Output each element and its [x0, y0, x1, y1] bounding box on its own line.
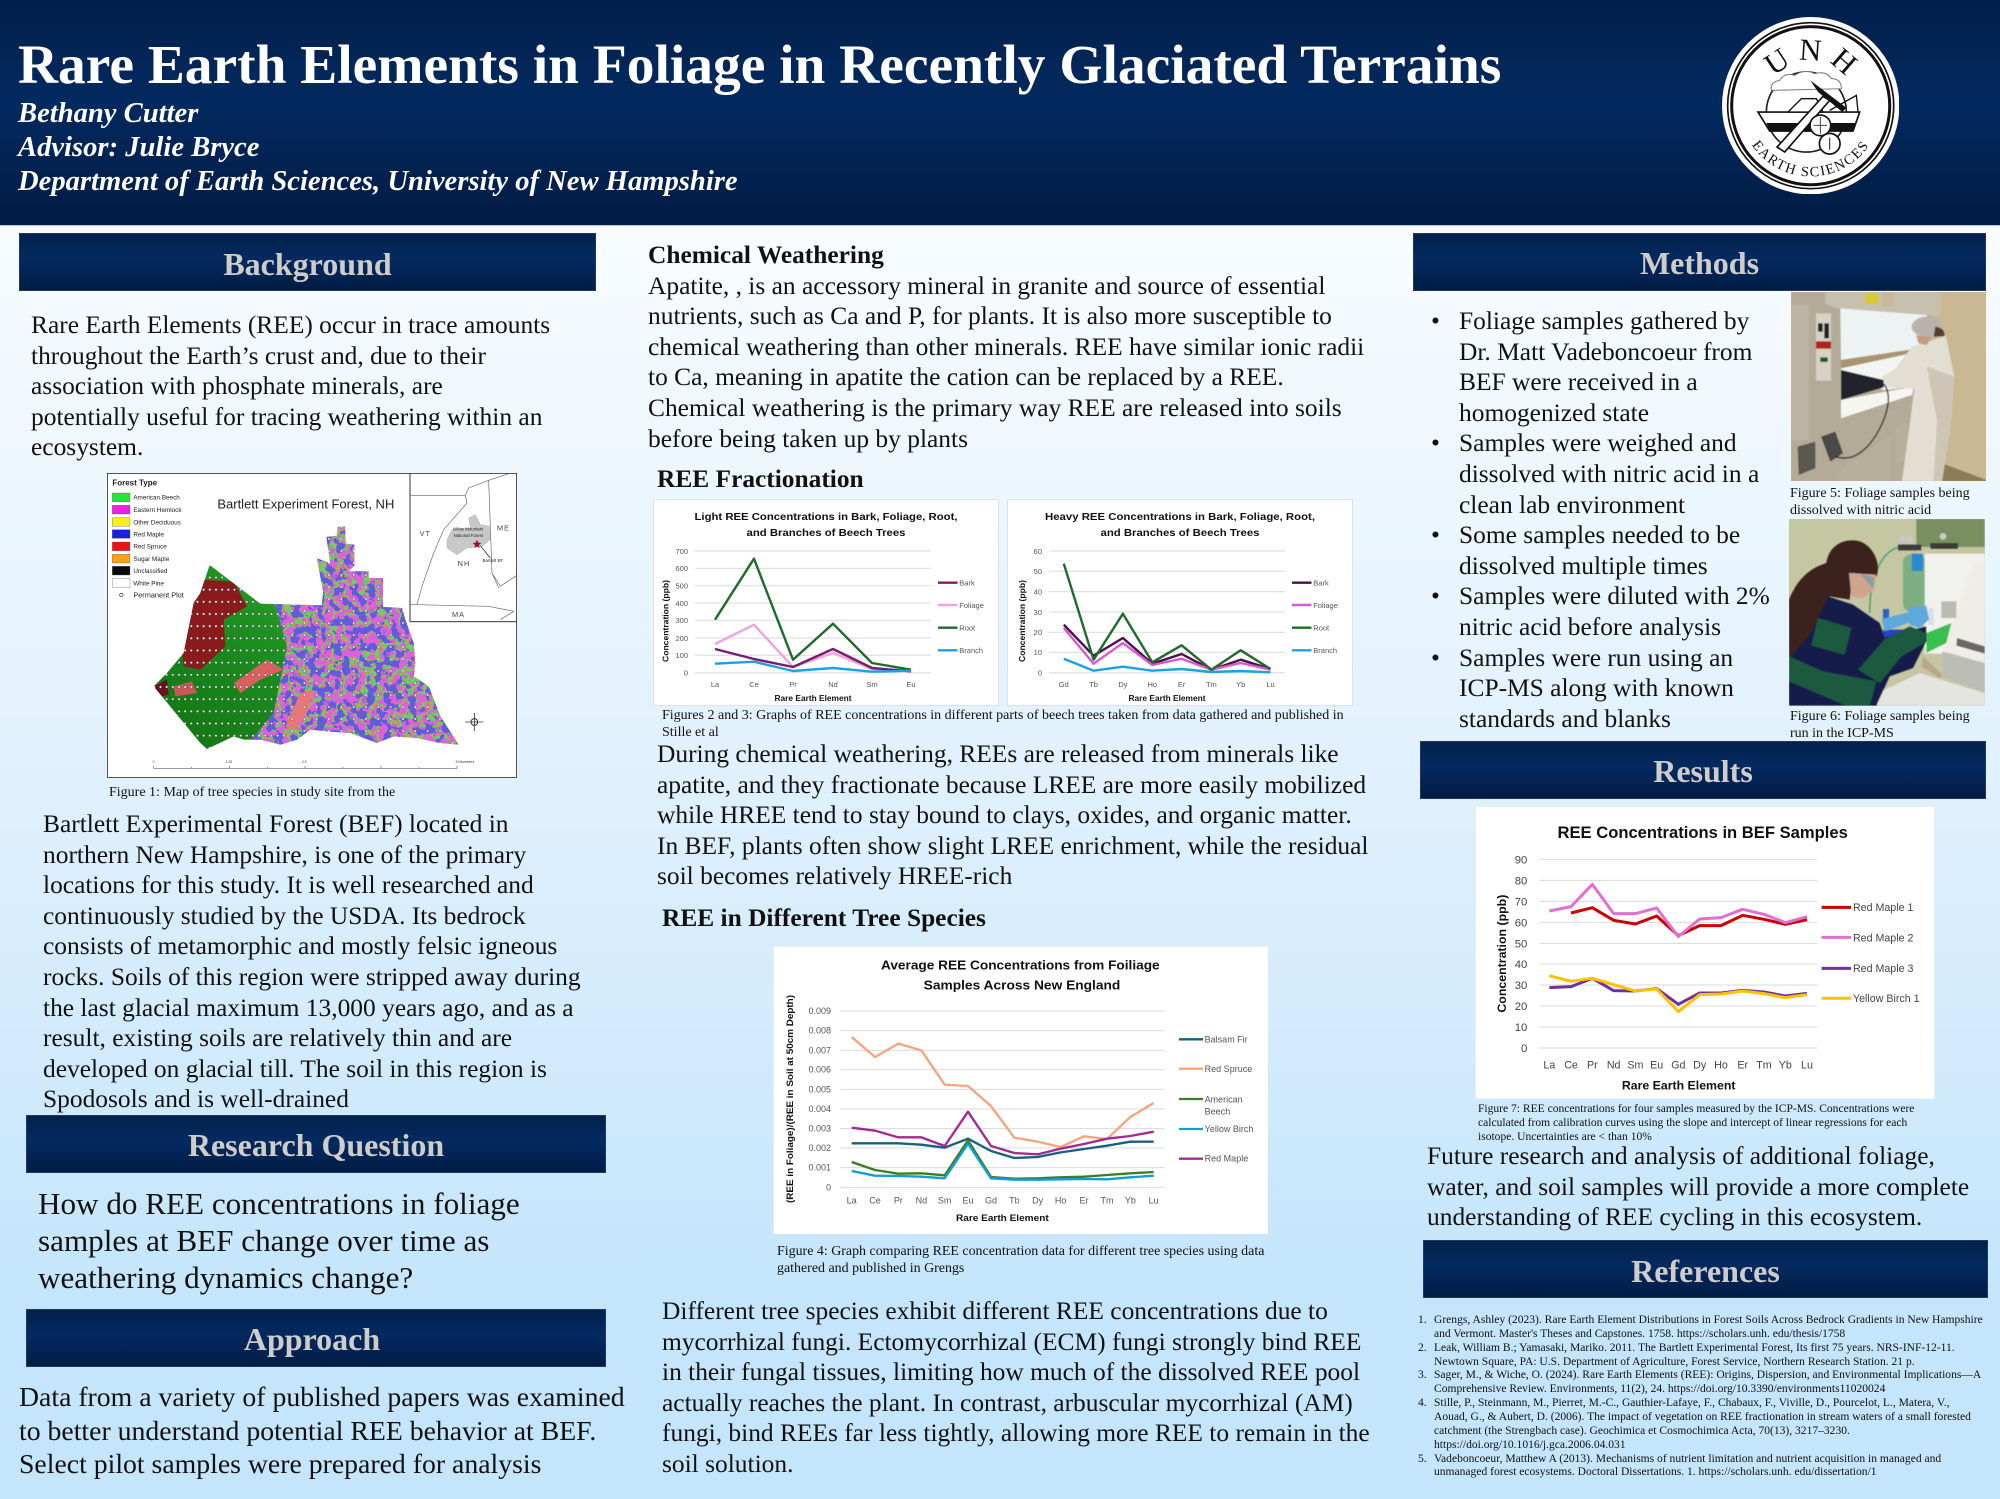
- caption: figure 1: Figure 1: Map of tree species in study site from the: [109, 785, 395, 800]
- text block: apatite: chemical weathering than other minerals. REE have similar ionic radii: [648, 332, 1364, 361]
- figure 7: BEF samples line chart: 80: [1514, 875, 1527, 887]
- figure 2: light REE chart: Pr: [789, 680, 797, 689]
- map legend: Permanent Plot: [133, 591, 184, 600]
- figure 2: light REE chart: La: [711, 680, 720, 689]
- figure 4: species line chart: Samples Across New England: [923, 977, 1120, 992]
- map legend: Red Maple: [133, 531, 164, 538]
- caption: figure 6: Figure 6: Foliage samples being: [1790, 709, 1970, 724]
- figure 3: heavy REE chart: 60: [1034, 547, 1042, 556]
- text block: Bartlett Experimental Forest: locations for this study. It is well researched and: [43, 870, 534, 899]
- figure 4: species line chart: Gd: [985, 1195, 997, 1205]
- figure 4: species line chart: La: [846, 1195, 856, 1205]
- figure 2: light REE chart: Root: [959, 624, 976, 633]
- panel: approach: [19, 1309, 625, 1480]
- bulleted list: methods: •: [1431, 520, 1440, 549]
- map legend: Eastern Hemlock: [133, 507, 182, 514]
- figure 2: light REE chart: Light REE Concentrations in Bark, Foliage, Root,: [694, 511, 958, 523]
- heading: Results: Results: [1653, 753, 1753, 789]
- figure 4: species line chart: American: [1204, 1094, 1242, 1104]
- figure 2: light REE chart: [653, 499, 999, 706]
- figure 4: species line chart: Dy: [1032, 1195, 1043, 1205]
- scale bar and north arrow: 0: [152, 760, 154, 764]
- text block: mycorrhizal fungi: soil solution.: [662, 1449, 793, 1478]
- caption: figure 6: [1790, 709, 1970, 741]
- figure 3: heavy REE chart: and Branches of Beech Trees: [1100, 527, 1260, 539]
- scale bar and north arrow: 2.5: [302, 760, 306, 764]
- figure 4: species line chart: 0.009: [808, 1006, 831, 1016]
- bulleted list: methods: Samples were diluted with 2%: [1459, 581, 1770, 610]
- figure 7: BEF samples line chart: Red Maple 3: [1853, 963, 1913, 975]
- text block: Bartlett Experimental Forest: Spodosols and is well-drained: [43, 1084, 349, 1113]
- figure 7: BEF samples line chart: Dy: [1693, 1060, 1707, 1072]
- figure 7: BEF samples line chart: 70: [1514, 896, 1527, 908]
- figure 4: species line chart: Tb: [1009, 1195, 1019, 1205]
- panel: REE fractionation: [653, 465, 1369, 890]
- reference list: Grengs, Ashley (2023). Rare Earth Element Distributions in Forest Soils Across Bedrock Gradients in New Hampshire: [1434, 1314, 1983, 1326]
- figure 4: species line chart: 0.008: [808, 1025, 831, 1035]
- figure 3: heavy REE chart: Root: [1313, 624, 1330, 633]
- reference list: 4.: [1418, 1397, 1427, 1409]
- text block: question: weathering dynamics change?: [38, 1260, 413, 1295]
- inset locator map: White Mountain: [453, 527, 483, 532]
- figure 3: heavy REE chart: 10: [1034, 648, 1042, 657]
- heading: Methods: Methods: [1640, 245, 1759, 281]
- figure 3: heavy REE chart: [1007, 499, 1353, 706]
- figure 7: BEF samples line chart: Nd: [1607, 1060, 1620, 1072]
- figure 1: forest type map: Bartlett Experiment Forest, NH: [217, 496, 394, 511]
- map legend: American Beech: [133, 495, 180, 502]
- caption: figure 4: [777, 1244, 1264, 1276]
- figure 7: BEF samples line chart: 30: [1514, 980, 1527, 992]
- figure 4: species line chart: Rare Earth Element: [956, 1213, 1048, 1223]
- inset locator map: [410, 473, 516, 622]
- figure 7: BEF samples line chart: Er: [1737, 1060, 1748, 1072]
- caption: figures 2 and 3: Stille et al: [662, 725, 719, 740]
- text block: what REE are: association with phosphate minerals, are: [31, 371, 443, 400]
- heading: Approach: Approach: [244, 1321, 380, 1357]
- heading: References: [1423, 1240, 1988, 1298]
- text block: fractionation: [657, 739, 1369, 890]
- figure 4: species line chart: 0.001: [808, 1162, 831, 1172]
- figure 3: heavy REE chart: Branch: [1313, 646, 1337, 655]
- reference list: and Vermont. Master's Theses and Capstones. 1758. https://scholars.unh. edu/thesis/1758: [1434, 1328, 1845, 1340]
- bulleted list: methods: •: [1431, 428, 1440, 457]
- figure 7: BEF samples line chart: Rare Earth Element: [1622, 1079, 1735, 1093]
- header banner: [0, 0, 2000, 226]
- figure 2: light REE chart: and Branches of Beech Trees: [746, 527, 906, 539]
- text block: future research: water, and soil samples will provide a more complete: [1427, 1172, 1969, 1201]
- bulleted list: methods: standards and blanks: [1459, 704, 1671, 733]
- figure 4: species line chart: (REE in Foliage)/(REE in Soil at 50cm Depth): [785, 995, 795, 1203]
- panel: chemical weathering: [648, 241, 1364, 453]
- caption: figure 5: [1790, 486, 1970, 518]
- text block: mycorrhizal fungi: actually reaches the plant. In contrast, arbuscular mycorrhizal (AM): [662, 1388, 1353, 1417]
- figure 2: light REE chart: Eu: [906, 680, 916, 689]
- figure 3: heavy REE chart: Concentration (ppb): [1018, 580, 1027, 662]
- figure 2: light REE chart: Ce: [749, 680, 759, 689]
- bulleted list: methods: Dr. Matt Vadeboncoeur from: [1459, 337, 1752, 366]
- text block: Bartlett Experimental Forest: continuously studied by the USDA. Its bedrock: [43, 901, 526, 930]
- figure 7: BEF samples line chart: 0: [1521, 1043, 1527, 1055]
- figure 4: species line chart: Red Spruce: [1204, 1064, 1252, 1074]
- figure 2: light REE chart: Rare Earth Element: [774, 694, 852, 703]
- figure 7: BEF samples line chart: [1475, 806, 1935, 1099]
- bulleted list: methods: •: [1431, 643, 1440, 672]
- text block: mycorrhizal fungi: fungi, bind REEs far less tightly, allowing more REE to remain in the: [662, 1418, 1370, 1447]
- reference list: Newtown Square, PA: U.S. Department of Agriculture, Forest Service, Northern Research Station. 21 p.: [1434, 1356, 1915, 1368]
- text block: apatite: [648, 271, 1364, 453]
- heading: Chemical Weathering: Chemical Weathering: [648, 241, 884, 269]
- figure 2: light REE chart: Concentration (ppb): [662, 580, 670, 662]
- authors and affiliation: [16, 98, 738, 197]
- figure 4: species line chart: Ho: [1055, 1195, 1066, 1205]
- figure 4: species line chart: Yellow Birch: [1204, 1124, 1253, 1134]
- text block: fractionation: apatite, and they fractionate because LREE are more easily mobilized: [657, 770, 1366, 799]
- bulleted list: methods: ICP-MS along with known: [1459, 673, 1734, 702]
- bulleted list: methods: BEF were received in a: [1459, 367, 1698, 396]
- figure 7: BEF samples line chart: Red Maple 2: [1853, 933, 1913, 945]
- text block: approach: Data from a variety of published papers was examined: [19, 1382, 625, 1413]
- figure 3: heavy REE chart: 20: [1034, 628, 1042, 637]
- inset locator map: NH: [457, 559, 470, 568]
- text block: Bartlett Experimental Forest: Bartlett Experimental Forest (BEF) located in: [43, 809, 509, 838]
- reference list: Stille, P., Steinmann, M., Pierret, M.-C., Gauthier-Lafaye, F., Chabaux, F., Viville, D., Pourcelot, L., Matera, V.,: [1434, 1397, 1950, 1409]
- caption: figure 5: dissolved with nitric acid: [1790, 503, 1931, 518]
- figure 4: species line chart: Er: [1079, 1195, 1088, 1205]
- scale bar and north arrow: 5 Kilometers: [455, 760, 474, 764]
- figure 4: species line chart: 0.007: [808, 1045, 831, 1055]
- figure 7: BEF samples line chart: Pr: [1587, 1060, 1598, 1072]
- caption: figure 7: isotope. Uncertainties are < than 10%: [1478, 1131, 1652, 1143]
- text block: Bartlett Experimental Forest: consists of metamorphic and mostly felsic igneous: [43, 931, 557, 960]
- authors and affiliation: Bethany Cutter: [18, 98, 198, 128]
- photo: figure 5 fume hood: [1791, 292, 1986, 481]
- figure 7: BEF samples line chart: Yb: [1778, 1060, 1792, 1072]
- figure 7: BEF samples line chart: La: [1543, 1060, 1555, 1072]
- figure 3: heavy REE chart: Rare Earth Element: [1128, 694, 1206, 703]
- text block: question: [38, 1186, 520, 1295]
- text block: Bartlett Experimental Forest: developed on glacial till. The soil in this region is: [43, 1054, 547, 1083]
- figure 3: heavy REE chart: Bark: [1313, 579, 1329, 588]
- figure 4: species line chart: Average REE Concentrations from Foiliage: [881, 957, 1159, 972]
- figure 2: light REE chart: 700: [675, 547, 688, 556]
- figure 2: light REE chart: 0: [684, 669, 688, 678]
- panel: methods: [1413, 233, 1986, 741]
- figure 7: BEF samples line chart: Sm: [1627, 1060, 1643, 1072]
- reference list: https://doi.org/10.1016/j.gca.2006.04.031: [1434, 1439, 1626, 1451]
- bulleted list: methods: •: [1431, 581, 1440, 610]
- caption: figure 6: run in the ICP-MS: [1790, 726, 1894, 741]
- text block: what REE are: throughout the Earth’s crust and, due to their: [31, 341, 486, 370]
- text block: mycorrhizal fungi: mycorrhizal fungi. Ectomycorrhizal (ECM) fungi strongly bind REE: [662, 1327, 1361, 1356]
- figure 2: light REE chart: 500: [675, 582, 688, 591]
- figure 2: light REE chart: 200: [675, 634, 688, 643]
- photo: figure 6 ICP-MS: [1789, 519, 1985, 706]
- reference list: catchment (the Strengbach case). Geochimica et Cosmochimica Acta, 70(13), 3217–3230.: [1434, 1425, 1850, 1437]
- bulleted list: methods: Samples were run using an: [1459, 643, 1733, 672]
- text block: apatite: before being taken up by plants: [648, 424, 968, 453]
- text block: mycorrhizal fungi: [662, 1296, 1370, 1478]
- bulleted list: methods: •: [1431, 306, 1440, 335]
- map legend: [112, 479, 184, 600]
- heading: Research Question: Research Question: [188, 1127, 444, 1163]
- heading: REE Fractionation: REE Fractionation: [657, 465, 864, 493]
- figure 7: BEF samples line chart: 40: [1514, 959, 1527, 971]
- panel: results: [1420, 741, 1986, 1231]
- caption: figure 4: gathered and published in Grengs: [777, 1261, 964, 1276]
- figure 4: species line chart: Nd: [915, 1195, 927, 1205]
- text block: approach: Select pilot samples were prepared for analysis: [19, 1449, 541, 1480]
- caption: figure 7: Figure 7: REE concentrations for four samples measured by the ICP-MS. Concentrations were: [1478, 1103, 1914, 1115]
- text block: Bartlett Experimental Forest: northern New Hampshire, is one of the primary: [43, 840, 526, 869]
- figure 3: heavy REE chart: Lu: [1266, 680, 1275, 689]
- figure 3: heavy REE chart: Dy: [1118, 680, 1128, 689]
- inset locator map: ME: [497, 524, 510, 533]
- text block: mycorrhizal fungi: Different tree species exhibit different REE concentrations due to: [662, 1296, 1328, 1325]
- caption: figures 2 and 3: [662, 708, 1344, 740]
- figure 7: BEF samples line chart: 20: [1514, 1001, 1527, 1013]
- text block: question: samples at BEF change over time as: [38, 1223, 489, 1258]
- heading: Methods: [1413, 233, 1986, 291]
- text block: what REE are: Rare Earth Elements (REE) occur in trace amounts: [31, 310, 550, 339]
- figure 2: light REE chart: Sm: [866, 680, 878, 689]
- text block: Bartlett Experimental Forest: the last glacial maximum 13,000 years ago, and as a: [43, 993, 574, 1022]
- panel: REE in different tree species: [662, 904, 1370, 1478]
- icon: UNH Earth Sciences logo: UNH: [1762, 40, 1858, 76]
- text block: what REE are: ecosystem.: [31, 432, 143, 461]
- text block: apatite: to Ca, meaning in apatite the cation can be replaced by a REE.: [648, 362, 1284, 391]
- inset locator map: Bartlett EF: [482, 558, 503, 563]
- bulleted list: methods: nitric acid before analysis: [1459, 612, 1721, 641]
- text block: future research: Future research and analysis of additional foliage,: [1427, 1141, 1935, 1170]
- figure 4: species line chart: [773, 946, 1268, 1234]
- figure 7: BEF samples line chart: Gd: [1671, 1060, 1685, 1072]
- heading: REE in Different Tree Species: REE in Different Tree Species: [662, 904, 986, 932]
- map legend: Forest Type: [112, 479, 157, 488]
- bulleted list: methods: Foliage samples gathered by: [1459, 306, 1749, 335]
- inset locator map: MA: [452, 610, 465, 619]
- heading: Background: [19, 233, 596, 291]
- figure 7: BEF samples line chart: Lu: [1801, 1060, 1813, 1072]
- figure 4: species line chart: Ce: [869, 1195, 880, 1205]
- figure 4: species line chart: 0.003: [808, 1123, 831, 1133]
- map legend: Unclassified: [133, 568, 168, 575]
- figure 2: light REE chart: Bark: [959, 579, 975, 588]
- figure 7: BEF samples line chart: Red Maple 1: [1853, 902, 1913, 914]
- figure 4: species line chart: Red Maple: [1204, 1153, 1248, 1163]
- bulleted list: methods: [1431, 306, 1770, 733]
- figure 2: light REE chart: Branch: [959, 646, 983, 655]
- reference list: Vadeboncoeur, Matthew A (2013). Mechanisms of nutrient limitation and nutrient acquisition in managed and: [1434, 1452, 1941, 1464]
- figure 2: light REE chart: 400: [675, 599, 688, 608]
- text block: what REE are: potentially useful for tracing weathering within an: [31, 402, 542, 431]
- authors and affiliation: Advisor: Julie Bryce: [18, 132, 259, 163]
- heading: References: References: [1631, 1253, 1780, 1289]
- figure 3: heavy REE chart: 30: [1034, 608, 1042, 617]
- reference list: Comprehensive Review. Environments, 11(2), 24. https://doi.org/10.3390/environments11020024: [1434, 1383, 1885, 1395]
- text block: future research: [1427, 1141, 1969, 1231]
- bulleted list: methods: homogenized state: [1459, 398, 1649, 427]
- icon: UNH Earth Sciences logo: EARTH SCIENCES: [1752, 140, 1868, 176]
- panel: references: [1418, 1240, 1988, 1478]
- text block: question: How do REE concentrations in foliage: [38, 1186, 520, 1221]
- text block: Bartlett Experimental Forest: [43, 809, 581, 1113]
- figure 4: species line chart: Sm: [938, 1195, 951, 1205]
- reference list: 5.: [1418, 1452, 1427, 1464]
- authors and affiliation: Department of Earth Sciences, University of New Hampshire: [18, 166, 738, 197]
- figure 7: BEF samples line chart: Ce: [1564, 1060, 1578, 1072]
- figure 3: heavy REE chart: 0: [1038, 669, 1042, 678]
- reference list: Sager, M., & Wiche, O. (2024). Rare Earth Elements (REE): Origins, Dispersion, and Environmental Implications—A: [1434, 1369, 1981, 1381]
- reference list: Aouad, G., & Aubert, D. (2006). The impact of vegetation on REE fractionation in stream waters of a small forested: [1434, 1411, 1971, 1423]
- text block: Bartlett Experimental Forest: result, existing soils are relatively thin and are: [43, 1023, 512, 1052]
- figure 4: species line chart: Lu: [1148, 1195, 1158, 1205]
- caption: figure 4: Figure 4: Graph comparing REE concentration data for different tree species using data: [777, 1244, 1264, 1259]
- figure 2: light REE chart: 100: [675, 651, 688, 660]
- figure 2: light REE chart: Nd: [828, 680, 838, 689]
- map legend: Red Spruce: [133, 544, 167, 551]
- figure 4: species line chart: Pr: [894, 1195, 903, 1205]
- map legend: Other Deciduous: [133, 519, 181, 526]
- text block: future research: understanding of REE cycling in this ecosystem.: [1427, 1202, 1922, 1231]
- text block: fractionation: while HREE tend to stay bound to clays, oxides, and organic matter.: [657, 800, 1352, 829]
- map legend: Sugar Maple: [133, 556, 169, 563]
- reference list: unmanaged forest ecosystems. Doctoral Dissertations. 1. https://scholars.unh. edu/dissertation/1: [1434, 1466, 1877, 1478]
- figure 2: light REE chart: 300: [675, 616, 688, 625]
- icon: UNH Earth Sciences logo: [1722, 17, 1899, 194]
- text block: fractionation: soil becomes relatively HREE-rich: [657, 861, 1012, 890]
- figure 2: light REE chart: Foliage: [959, 601, 984, 610]
- caption: figure 7: [1478, 1103, 1914, 1143]
- figure 4: species line chart: 0.004: [808, 1104, 831, 1114]
- figure 3: heavy REE chart: Gd: [1059, 680, 1069, 689]
- text block: fractionation: During chemical weathering, REEs are released from minerals like: [657, 739, 1339, 768]
- inset locator map: VT: [419, 529, 431, 538]
- map legend: White Pine: [133, 580, 164, 587]
- bulleted list: methods: Samples were weighed and: [1459, 428, 1737, 457]
- figure 7: BEF samples line chart: REE Concentrations in BEF Samples: [1557, 823, 1848, 842]
- heading: Results: [1420, 741, 1986, 799]
- figure 3: heavy REE chart: Yb: [1236, 680, 1245, 689]
- figure 3: heavy REE chart: Foliage: [1313, 601, 1338, 610]
- heading: Approach: [26, 1309, 606, 1367]
- figure 3: heavy REE chart: Tb: [1089, 680, 1098, 689]
- heading: Research Question: [26, 1115, 606, 1173]
- bulleted list: methods: dissolved with nitric acid in a: [1459, 459, 1759, 488]
- figure 2: light REE chart: 600: [675, 564, 688, 573]
- caption: figure 5: Figure 5: Foliage samples being: [1790, 486, 1970, 501]
- figure 7: BEF samples line chart: 50: [1514, 938, 1527, 950]
- reference list: 1.: [1418, 1314, 1427, 1326]
- text block: approach: [19, 1382, 625, 1480]
- figure 7: BEF samples line chart: Eu: [1650, 1060, 1663, 1072]
- figure 7: BEF samples line chart: Yellow Birch 1: [1853, 993, 1919, 1005]
- scale bar and north arrow: [152, 713, 483, 768]
- caption: figures 2 and 3: Figures 2 and 3: Graphs of REE concentrations in different parts of beech trees taken from data gathered and published in: [662, 708, 1344, 723]
- figure 7: BEF samples line chart: 60: [1514, 917, 1527, 929]
- bulleted list: methods: Some samples needed to be: [1459, 520, 1740, 549]
- inset locator map: National Forest: [453, 533, 483, 538]
- figure 4: species line chart: 0.006: [808, 1064, 831, 1074]
- figure 7: BEF samples line chart: Tm: [1756, 1060, 1771, 1072]
- reference list: Leak, William B.; Yamasaki, Mariko. 2011. The Bartlett Experimental Forest, Its first 75 years. NRS-INF-12-11.: [1434, 1342, 1955, 1354]
- figure 7: BEF samples line chart: Concentration (ppb): [1495, 895, 1509, 1013]
- heading: Background: Background: [223, 246, 392, 282]
- text block: apatite: Chemical weathering is the primary way REE are released into soils: [648, 393, 1342, 422]
- figure 4: species line chart: Eu: [962, 1195, 973, 1205]
- figure 3: heavy REE chart: Ho: [1148, 680, 1157, 689]
- figure 3: heavy REE chart: 40: [1034, 588, 1042, 597]
- text block: apatite: Apatite, , is an accessory mineral in granite and source of essential: [648, 271, 1325, 300]
- reference list: 2.: [1418, 1342, 1427, 1354]
- figure 4: species line chart: Tm: [1100, 1195, 1113, 1205]
- figure 4: species line chart: Beech: [1204, 1106, 1230, 1116]
- text block: mycorrhizal fungi: in their fungal tissues, limiting how much of the dissolved REE pool: [662, 1357, 1360, 1386]
- reference list: 3.: [1418, 1369, 1427, 1381]
- text block: what REE are: [31, 310, 550, 461]
- panel: research question: [26, 1115, 606, 1295]
- text block: apatite: nutrients, such as Ca and P, for plants. It is also more susceptible to: [648, 301, 1332, 330]
- scale bar and north arrow: 1.25: [225, 760, 232, 764]
- figure 3: heavy REE chart: Er: [1178, 680, 1186, 689]
- title: Rare Earth Elements in Foliage in Recently Glaciated Terrains: [18, 34, 1501, 94]
- figure 3: heavy REE chart: Heavy REE Concentrations in Bark, Foliage, Root,: [1045, 511, 1315, 523]
- text block: approach: to better understand potential REE behavior at BEF.: [19, 1416, 596, 1447]
- figure 4: species line chart: Balsam Fir: [1204, 1034, 1247, 1044]
- figure 4: species line chart: Yb: [1125, 1195, 1136, 1205]
- figure 7: BEF samples line chart: 10: [1514, 1022, 1527, 1034]
- bulleted list: methods: dissolved multiple times: [1459, 551, 1708, 580]
- text block: Bartlett Experimental Forest: rocks. Soils of this region were stripped away during: [43, 962, 581, 991]
- figure 4: species line chart: 0.005: [808, 1084, 831, 1094]
- reference list: [1418, 1314, 1983, 1478]
- bulleted list: methods: clean lab environment: [1459, 490, 1685, 519]
- figure 1: forest type map: [107, 473, 517, 778]
- figure 7: BEF samples line chart: Ho: [1714, 1060, 1728, 1072]
- figure 4: species line chart: 0: [826, 1182, 831, 1192]
- caption: figure 7: calculated from calibration curves using the slope and intercept of linear regressions for each: [1478, 1117, 1907, 1129]
- figure 7: BEF samples line chart: 90: [1514, 854, 1527, 866]
- figure 3: heavy REE chart: Tm: [1206, 680, 1217, 689]
- figure 4: species line chart: 0.002: [808, 1143, 831, 1153]
- panel: background: [19, 233, 596, 1113]
- text block: fractionation: In BEF, plants often show slight LREE enrichment, while the residual: [657, 831, 1369, 860]
- figure 3: heavy REE chart: 50: [1034, 567, 1042, 576]
